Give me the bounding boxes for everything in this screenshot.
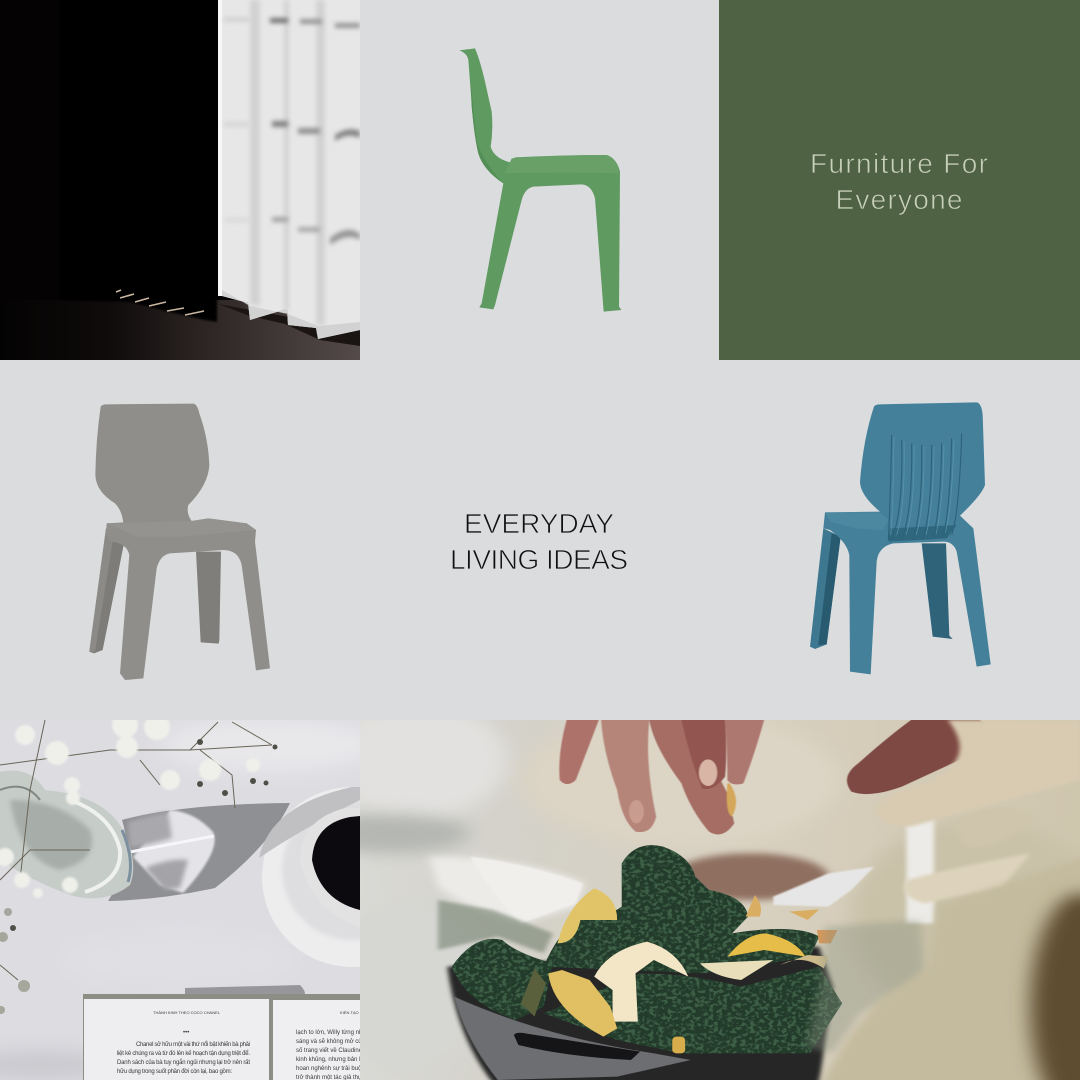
title: EVERYDAY — [464, 508, 614, 539]
carpet floor — [88, 300, 360, 360]
photo: hands garnishing a skillet of greens — [360, 720, 1080, 1080]
book text: kinh khủng, nhưng bản hồi — [296, 1056, 367, 1063]
skillet — [447, 947, 833, 1080]
blurred background tones — [360, 720, 1040, 984]
right hand — [847, 720, 1080, 903]
blurred foreground shoulder — [805, 853, 1080, 1080]
panel: green tagline — [719, 0, 1080, 360]
book text: KIẾN TẠO — [340, 1010, 359, 1015]
book text: lạch to lớn, Willy từng nhắ — [296, 1029, 366, 1036]
light slits under the dark curtain — [116, 290, 204, 315]
backrest ribs shadow teeth — [888, 525, 957, 542]
book text: ••• — [183, 1030, 189, 1036]
white plate — [429, 857, 585, 923]
book text: hoan nghênh sự trải buộc — [296, 1066, 364, 1072]
tagline text — [810, 148, 988, 215]
backrest ribs — [888, 433, 962, 540]
curtain hem — [222, 290, 360, 339]
broccoli highlights — [452, 845, 842, 1053]
book text: Danh sách của bà tuy ngắn ngủi nhưng lại trở nên rất — [117, 1059, 250, 1066]
photo: vase, coffee and open book on linen — [0, 720, 360, 1080]
left hand fingers — [559, 720, 764, 834]
greens — [452, 845, 842, 1053]
book text: Chanel sở hữu một vài thứ nổi bật khiến bà phải — [136, 1041, 250, 1048]
book text: số trang viết về Claudine — [296, 1048, 363, 1054]
sheer curtain — [218, 0, 360, 339]
chair: green side view — [459, 48, 621, 312]
coffee cup and saucer — [259, 787, 360, 967]
lemon slices — [521, 888, 838, 1053]
chair: grey front view — [89, 404, 270, 680]
glass vase — [0, 770, 133, 898]
book text — [117, 1010, 367, 1080]
baby's breath flowers — [0, 712, 278, 1014]
chair: blue back view — [810, 402, 991, 674]
dark curtain lower edge — [88, 300, 218, 322]
blurred foliage left — [438, 900, 553, 953]
open book — [83, 985, 367, 1080]
tagline text: Everyone — [836, 184, 962, 215]
floor shadow by the wall — [218, 304, 360, 346]
title: LIVING IDEAS — [450, 544, 628, 575]
book text: liệt kê chúng ra và từ đó lên kế hoạch tận dụng triệt để. — [117, 1050, 250, 1057]
window frame shadows — [224, 17, 360, 245]
tagline text: Furniture For — [810, 148, 988, 179]
book text: THÀNH KINH THEO COCO CHANEL — [153, 1010, 221, 1015]
book text: hữu dụng trong suốt phần đời còn lại, bao gồm: — [117, 1069, 232, 1075]
book text: sáng và sẽ không mở cửa — [296, 1038, 366, 1045]
vase shadow — [108, 803, 290, 901]
title — [450, 508, 628, 575]
photo: dark curtain and sheer curtain — [0, 0, 360, 360]
